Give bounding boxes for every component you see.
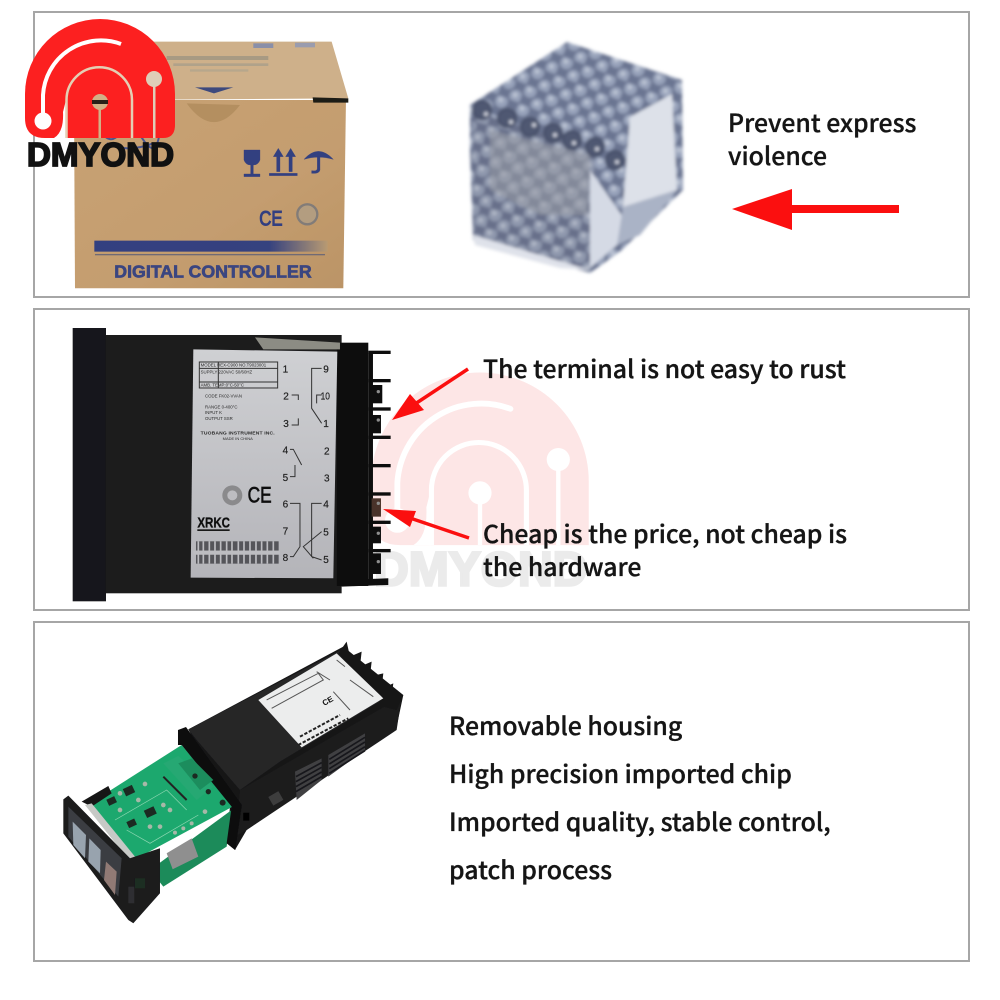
text: prevent express violence: Prevent express	[728, 104, 916, 140]
arrow: to terminal upper	[392, 369, 468, 420]
terminal numbers: 10	[321, 392, 330, 403]
terminal numbers: 5	[283, 473, 289, 484]
text: cheap price: the hardware	[483, 548, 641, 584]
terminals teeth	[338, 642, 403, 710]
icon: kraft product box	[74, 42, 348, 288]
body flange	[178, 727, 242, 850]
logo wordmark: DMYOND	[27, 136, 174, 173]
watermark logo	[371, 373, 589, 597]
circuit board	[90, 745, 233, 857]
icon: controller side view: CODE FK02-VVAN	[205, 393, 242, 398]
text: terminal rust: The terminal is not easy to rust	[483, 350, 846, 386]
lower board	[150, 810, 232, 887]
vents	[295, 758, 322, 800]
terminal numbers: 1	[283, 364, 289, 375]
CE on module label: CE	[321, 694, 335, 708]
arrow: to terminal lower	[383, 509, 469, 538]
panel: housing	[34, 622, 969, 961]
icon: controller side view: OUTPUT SSR	[205, 416, 233, 421]
icon: controller with pulled out circuit board	[63, 642, 403, 923]
text: feature list	[449, 707, 831, 887]
ribbon cable	[167, 838, 198, 869]
terminal numbers: 3	[324, 474, 330, 485]
body	[188, 647, 403, 850]
logo: DMYOND	[25, 19, 175, 173]
icon: CE mark on box: CE	[259, 206, 283, 230]
icon: controller side view: INPUT K	[205, 410, 222, 415]
terminal numbers: 2	[324, 446, 330, 457]
icon: fragile glass	[244, 150, 260, 177]
icon: round certification mark	[297, 204, 317, 224]
text: feature list: patch process	[449, 851, 612, 887]
icon: this way up arrows	[269, 148, 297, 176]
device label plate	[191, 349, 337, 578]
barcodes	[196, 541, 279, 551]
logo arch	[25, 19, 175, 138]
terminal numbers: 1	[323, 419, 329, 430]
brand XRKC: XRKC	[197, 515, 230, 531]
terminal numbers: 8	[283, 553, 289, 564]
terminal numbers: 3	[283, 419, 289, 430]
watermark logo: DMYOND	[374, 544, 587, 597]
text: prevent express violence: violence	[728, 137, 827, 173]
panel: packaging	[34, 12, 969, 297]
terminal numbers: 4	[283, 446, 289, 457]
panel: terminals	[34, 309, 969, 610]
icon: controller side view: RANGE 0-400°C	[205, 404, 238, 409]
text: cheap price: Cheap is the price, not cheap is	[483, 515, 847, 551]
terminal numbers: 4	[323, 500, 329, 511]
text: feature list: Imported quality, stable control,	[449, 803, 831, 839]
terminal numbers: 7	[283, 526, 289, 537]
box label: DIGITAL CONTROLLER	[114, 262, 312, 282]
icon: controller side view	[73, 328, 391, 601]
terminal numbers: 9	[323, 364, 329, 375]
text: feature list: High precision imported chip	[449, 755, 792, 791]
arrow: pointing to cube	[732, 189, 899, 230]
terminal numbers: 2	[283, 392, 289, 403]
label fine print: MODEL REX-C900 NO.T9023001	[201, 363, 267, 368]
icon: controller side view: TUOBANG INSTRUMENT INC.	[201, 430, 275, 436]
terminal numbers	[283, 364, 330, 566]
terminals	[368, 351, 391, 580]
icon: bubble wrapped cube	[470, 42, 683, 273]
icon: umbrella	[304, 151, 333, 173]
icon: controller side view: MADE IN CHINA	[223, 436, 253, 441]
icon: controller side view: SUPPLY 220VAC 50/60HZ	[201, 369, 252, 374]
CE mark: CE	[248, 483, 272, 508]
front bezel	[63, 796, 160, 923]
label	[258, 653, 383, 747]
text: cheap price	[483, 515, 847, 584]
icon: controller side view: AMB. TEMP:0°C-50°C	[201, 383, 244, 388]
text: prevent express violence	[728, 104, 916, 173]
text: feature list: Removable housing	[449, 707, 682, 743]
terminal numbers: 5	[323, 527, 329, 538]
terminal numbers: 6	[283, 500, 289, 511]
terminal numbers: 5	[323, 555, 329, 566]
